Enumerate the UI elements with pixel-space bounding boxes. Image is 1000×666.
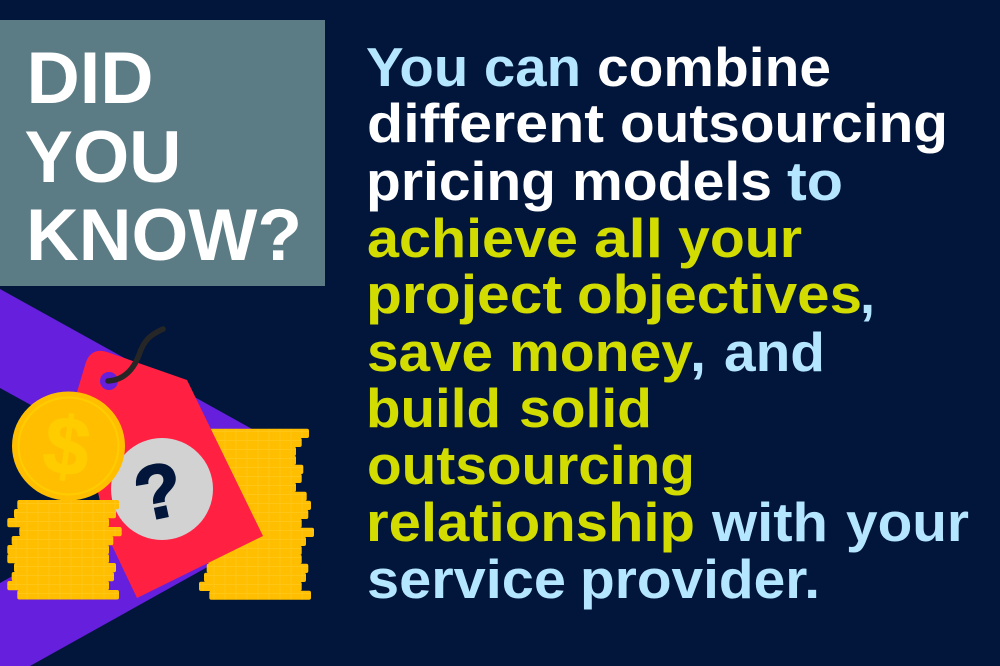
line 6: money [509, 321, 693, 383]
line 2: outsourcing [620, 92, 948, 154]
question mark badge: ? [127, 446, 190, 538]
line 1 [366, 36, 831, 98]
line 8: outsourcing [367, 434, 695, 496]
line 9 [366, 491, 969, 553]
line 2: different [367, 92, 604, 154]
line 3: to [787, 150, 843, 212]
question mark badge [111, 438, 213, 540]
line 9: your [846, 491, 969, 553]
line 6: and [724, 321, 825, 383]
heading text: KNOW? [26, 195, 302, 276]
line 5: , [860, 263, 875, 325]
line 10: provider. [580, 548, 820, 610]
right coin stack [199, 429, 314, 600]
heading text: YOU [24, 117, 182, 198]
line 10 [367, 548, 820, 610]
line 6: save [367, 321, 493, 383]
tag hole [100, 372, 118, 390]
heading panel: did you know [0, 20, 325, 286]
body text: main message [366, 36, 969, 610]
line 6: , [690, 321, 706, 383]
line 3 [366, 150, 843, 212]
line 6 [367, 321, 825, 383]
left coin stack [7, 500, 122, 600]
line 5: project [366, 263, 562, 325]
line 3: pricing [366, 150, 556, 212]
line 4: all [594, 207, 663, 269]
line 7 [366, 377, 652, 439]
line 10: service [367, 548, 566, 610]
line 2 [367, 92, 948, 154]
dollar coin: $ [38, 399, 96, 495]
purple chevron background shape [0, 289, 290, 666]
line 3: models [572, 150, 772, 212]
price tag [77, 351, 263, 598]
line 4 [367, 207, 802, 269]
line 4: achieve [367, 207, 578, 269]
illustration: price tag and coins [7, 329, 314, 600]
dollar coin [12, 392, 125, 500]
line 1: combine [597, 36, 831, 98]
heading text: DID [26, 38, 154, 119]
line 5 [366, 263, 875, 325]
line 7: solid [519, 377, 652, 439]
line 5: objectives [577, 263, 862, 325]
line 9: with [711, 491, 828, 553]
line 7: build [366, 377, 501, 439]
line 9: relationship [366, 491, 695, 553]
tag string [108, 329, 163, 381]
line 1: You can [366, 36, 581, 98]
line 4: your [678, 207, 802, 269]
heading text [24, 38, 302, 276]
